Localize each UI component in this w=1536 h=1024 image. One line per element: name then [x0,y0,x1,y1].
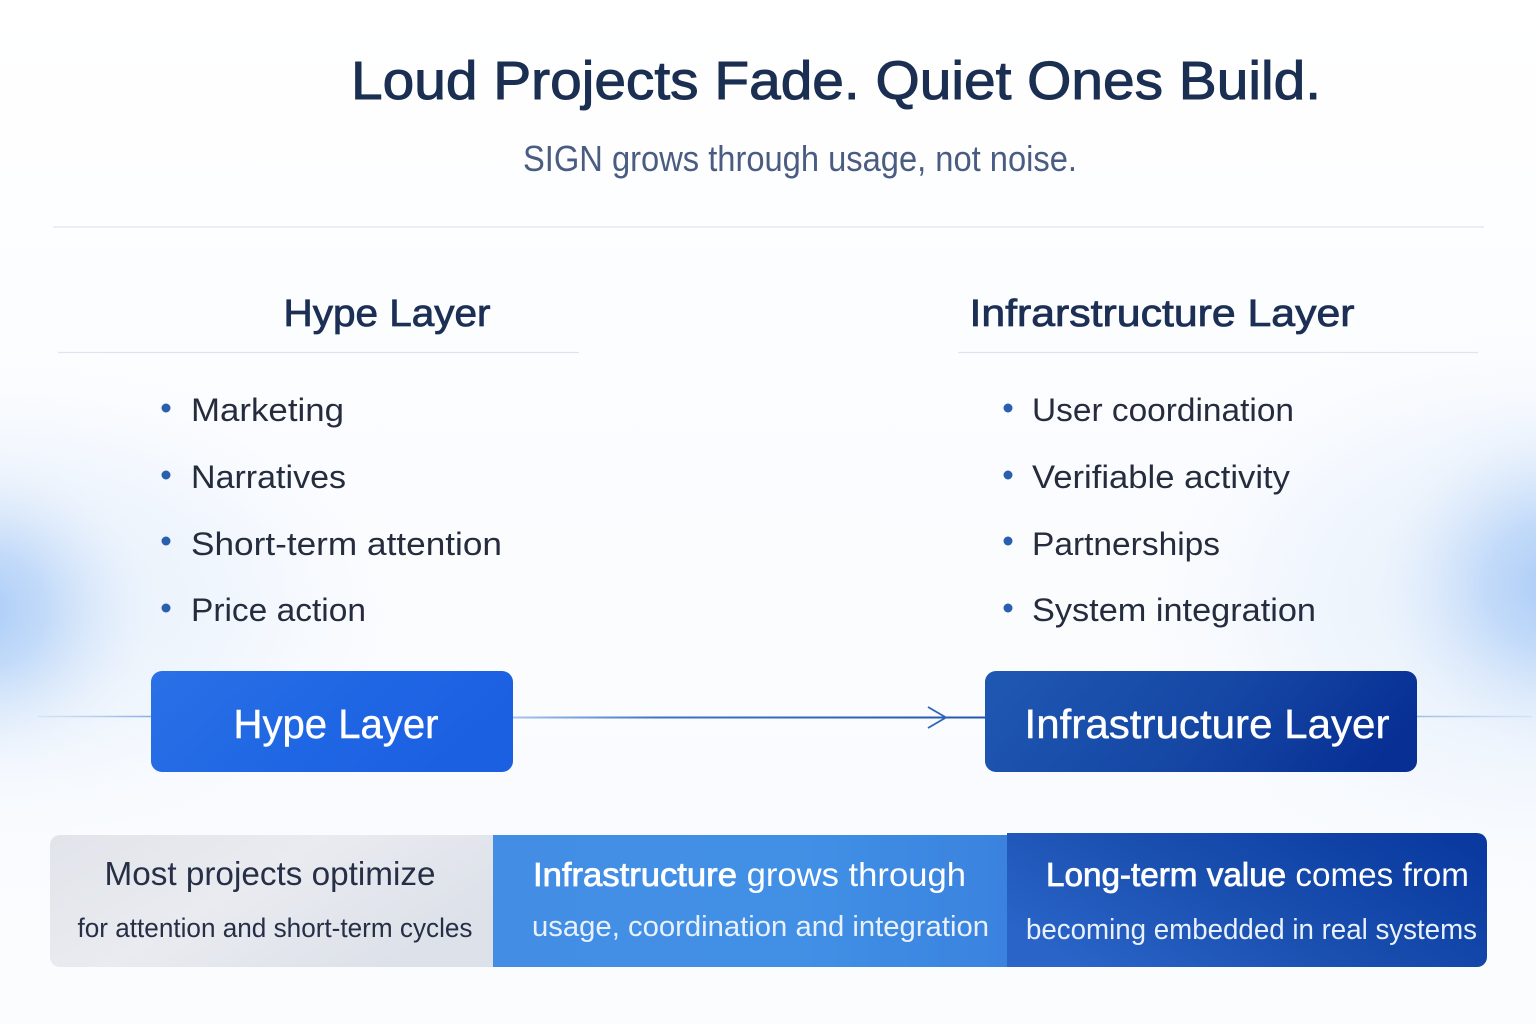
heading: hype layer: Hype Layer [284,293,491,335]
panel: summary grey [50,835,493,967]
bullet list: infrastructure: Verifiable activity [1032,459,1290,495]
bullet list: hype: Narratives [191,459,346,495]
panel: summary mid blue: usage, coordination and integration [532,911,989,943]
panel: hype layer list [58,293,579,628]
bullet list: infrastructure [1004,392,1316,628]
subtitle: SIGN grows through usage, not noise. [523,138,1077,179]
heading: infrastructure layer: Infrarstructure Layer [970,293,1355,335]
bullet list: hype [162,392,502,628]
panel: summary dark blue: Long-term value comes from [1046,856,1469,893]
bullet list: infrastructure: System integration [1032,592,1316,628]
button: infrastructure layer: Infrastructure Layer [1024,701,1390,747]
bullet list: infrastructure: Partnerships [1032,526,1220,562]
arrow: hype to infrastructure [513,707,985,728]
button: hype layer [151,671,513,772]
panel: summary mid blue: Infrastructure grows through [533,856,966,893]
panel: summary dark blue: becoming embedded in real systems [1026,914,1477,946]
panel: summary dark blue [1007,833,1487,967]
button: infrastructure layer [985,671,1417,772]
bullet list: hype: Short-term attention [191,526,502,562]
panel: summary grey: for attention and short-term cycles [78,913,472,943]
panel: infrastructure layer list [958,293,1478,628]
title: Loud Projects Fade. Quiet Ones Build. [351,51,1321,111]
panel: summary mid blue [493,835,1007,967]
bullet list: hype: Price action [191,592,366,628]
panel: summary grey: Most projects optimize [104,855,436,892]
button: hype layer: Hype Layer [234,701,438,747]
bullet list: hype: Marketing [191,392,344,428]
bullet list: infrastructure: User coordination [1032,392,1294,428]
